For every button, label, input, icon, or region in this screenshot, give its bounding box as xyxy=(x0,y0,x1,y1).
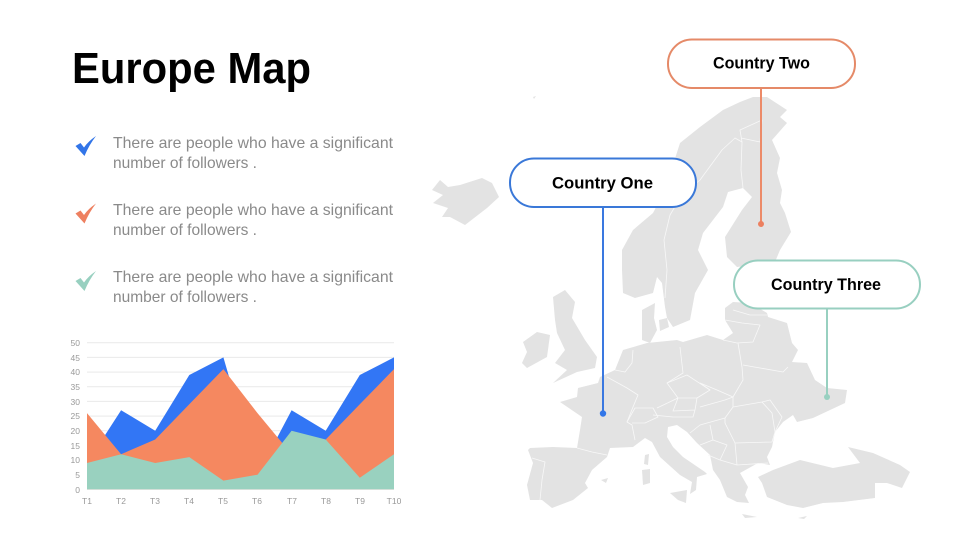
map: Turkey and Caucasus xyxy=(758,447,910,508)
series: blue area xyxy=(87,357,394,489)
icon: orange check xyxy=(76,204,96,224)
y axis labels: 15 xyxy=(71,441,80,451)
x axis labels: T10 xyxy=(387,496,402,506)
text: first point: There are people who have a significant xyxy=(113,135,394,152)
leader line and dot: Country Three xyxy=(824,308,830,400)
x axis labels: T4 xyxy=(184,496,194,506)
bullet: first point xyxy=(76,135,394,172)
leader line and dot: Country One xyxy=(600,207,606,417)
map: Sicily xyxy=(670,490,687,503)
callout: Country One xyxy=(510,158,696,417)
x axis labels: T6 xyxy=(252,496,262,506)
series: teal area xyxy=(87,431,394,489)
y axis labels: 50 xyxy=(71,338,80,348)
y axis labels: 30 xyxy=(71,397,80,407)
title: Europe Map xyxy=(72,44,311,93)
map: Denmark xyxy=(642,303,657,343)
map: small islands xyxy=(533,96,807,519)
label: Country One: Country One xyxy=(552,174,653,192)
map: continental Europe xyxy=(527,302,847,508)
icon: blue check xyxy=(76,136,96,156)
pill: Country Three xyxy=(734,260,920,308)
pill: Country One xyxy=(510,158,696,207)
icon: teal check xyxy=(76,271,96,291)
map: Ireland xyxy=(522,332,550,368)
text: third point: number of followers . xyxy=(113,289,257,306)
map of Europe xyxy=(432,96,910,519)
text: third point: There are people who have a significant xyxy=(113,269,394,286)
x axis labels xyxy=(82,496,402,506)
area chart xyxy=(71,338,402,506)
bullet: third point xyxy=(76,269,394,306)
y axis labels xyxy=(71,338,80,495)
text: second point: There are people who have a significant xyxy=(113,202,394,219)
bullet: second point xyxy=(76,202,394,239)
callout: Country Three xyxy=(734,260,920,400)
y axis labels: 40 xyxy=(71,367,80,377)
y axis labels: 5 xyxy=(75,470,80,480)
pill: Country Two xyxy=(668,40,855,88)
x axis labels: T8 xyxy=(321,496,331,506)
label: Country Three: Country Three xyxy=(771,275,881,294)
x axis labels: T3 xyxy=(150,496,160,506)
text: first point: number of followers . xyxy=(113,155,257,172)
x axis labels: T9 xyxy=(355,496,365,506)
y axis labels: 25 xyxy=(71,411,80,421)
y axis labels: 35 xyxy=(71,382,80,392)
map: Iceland xyxy=(432,178,499,225)
map: Great Britain xyxy=(553,290,597,383)
x axis labels: T1 xyxy=(82,496,92,506)
map: Danish islands xyxy=(659,318,669,331)
text: second point: number of followers . xyxy=(113,222,257,239)
callout: Country Two xyxy=(668,40,855,227)
x axis labels: T5 xyxy=(218,496,228,506)
y axis labels: 10 xyxy=(71,455,80,465)
label: Country Two: Country Two xyxy=(713,54,810,72)
y axis labels: 45 xyxy=(71,353,80,363)
y axis labels: 20 xyxy=(71,426,80,436)
map: Corsica xyxy=(644,454,649,465)
y axis labels: 0 xyxy=(75,485,80,495)
x axis labels: T2 xyxy=(116,496,126,506)
x axis labels: T7 xyxy=(287,496,297,506)
leader line and dot: Country Two xyxy=(758,88,764,227)
series: orange area xyxy=(87,369,394,489)
map: Sardinia xyxy=(642,469,650,485)
bullet list xyxy=(76,135,394,306)
map: Scandinavia xyxy=(622,97,791,327)
